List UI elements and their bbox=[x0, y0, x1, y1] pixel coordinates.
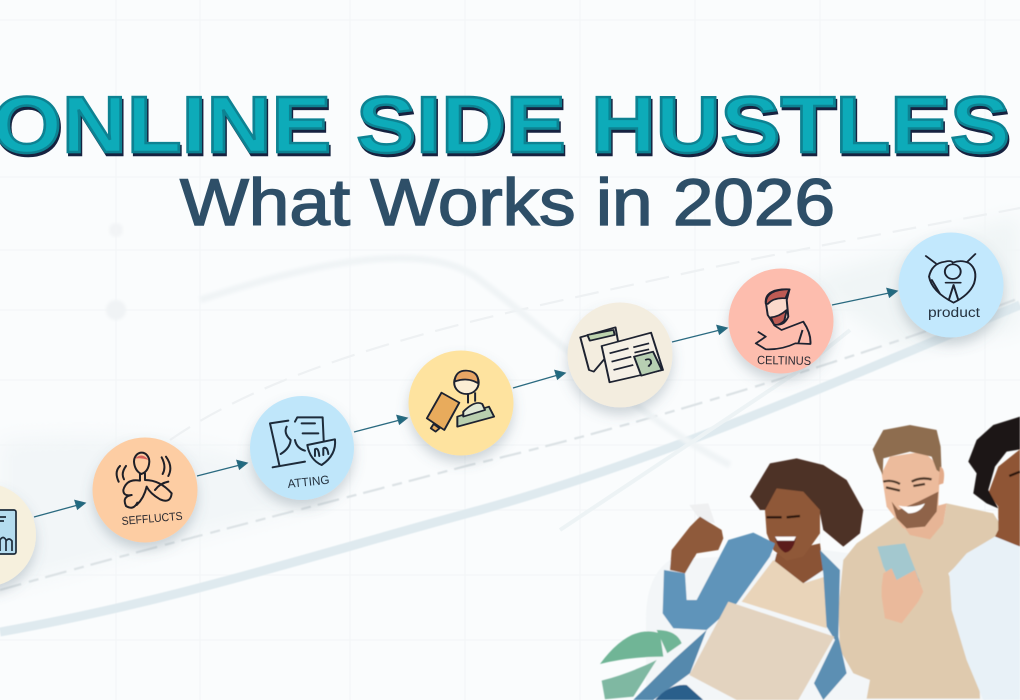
arrows connecting the steps bbox=[34, 288, 897, 517]
woman hair bbox=[750, 458, 863, 547]
step 2: orange circle SEFFLUCTS: SEFFLUCTS bbox=[121, 511, 183, 528]
plant leaves bbox=[600, 630, 682, 699]
white sofa bbox=[646, 517, 1007, 700]
photo: three people looking at phones bbox=[600, 417, 1020, 700]
third person bbox=[949, 417, 1020, 700]
step 3: blue circle ATTING bbox=[250, 396, 354, 500]
woman body bbox=[633, 488, 847, 700]
title: ONLINE SIDE HUSTLES: ONLINE SIDE HUSTLES bbox=[0, 80, 1010, 169]
man bbox=[838, 425, 1002, 699]
step 4: yellow circle with person and parcel icon bbox=[408, 350, 514, 456]
step 7: blue circle product bbox=[898, 232, 1004, 338]
step 7: blue circle product: product bbox=[928, 305, 980, 320]
step 5: cream circle with documents icon bbox=[568, 302, 672, 408]
laptop bbox=[689, 602, 834, 700]
step 2: orange circle SEFFLUCTS bbox=[92, 438, 198, 542]
subtitle: What Works in 2026: What Works in 2026 bbox=[180, 165, 835, 239]
step 1: cream circle with document icon bbox=[0, 483, 36, 587]
step 6: salmon circle CELTINUS bbox=[728, 268, 834, 374]
step 3: blue circle ATTING: ATTING bbox=[287, 473, 330, 491]
step 6: salmon circle CELTINUS: CELTINUS bbox=[757, 353, 811, 368]
woman hand with phone bbox=[689, 503, 715, 523]
